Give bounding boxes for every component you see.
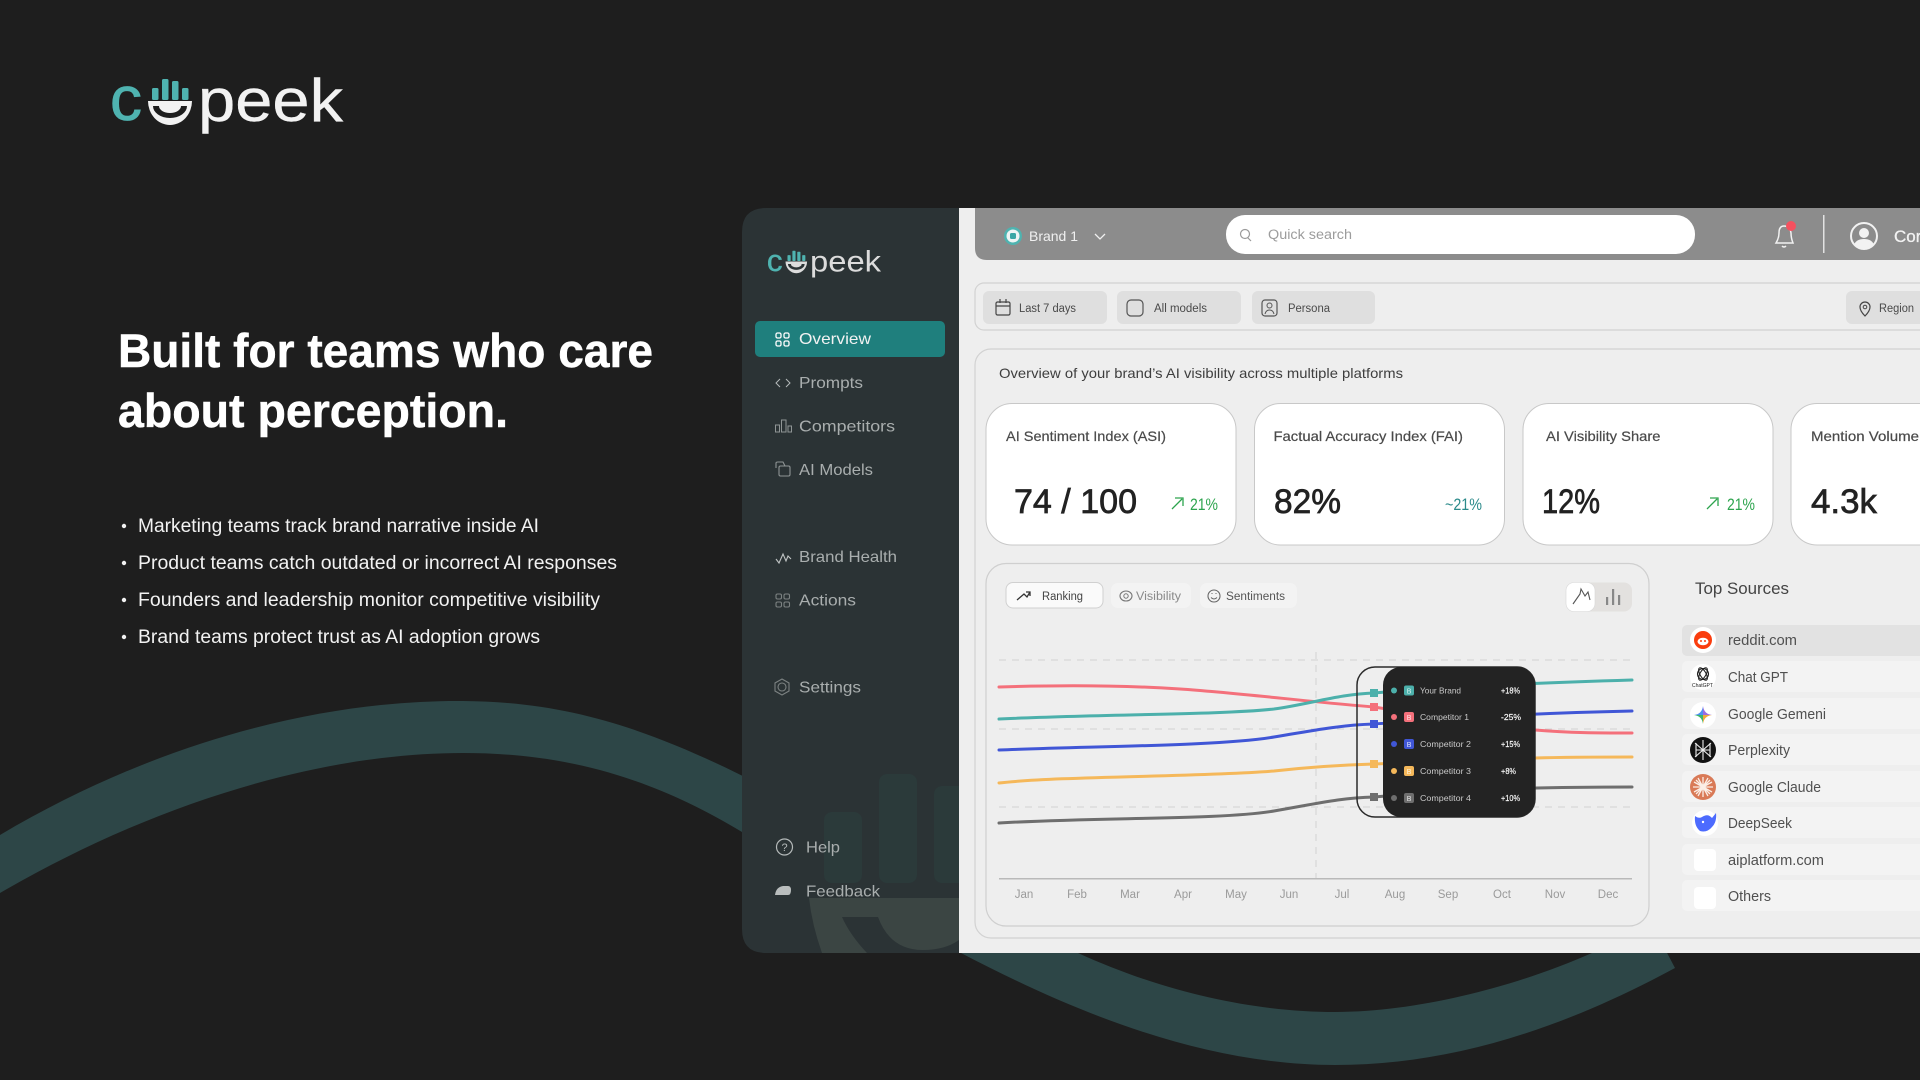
source: DeepSeek: DeepSeek bbox=[1728, 815, 1792, 832]
bullet list: Marketing teams track brand narrative inside AI bbox=[138, 516, 539, 537]
source: Others: Others bbox=[1728, 888, 1771, 905]
tooltip row: Competitor 2: Competitor 2 bbox=[1420, 739, 1471, 749]
chip: All models: All models bbox=[1154, 303, 1207, 315]
card: AI Sentiment Index: AI Sentiment Index (ASI) bbox=[1006, 428, 1166, 444]
tooltip row: Your Brand: +18% bbox=[1501, 686, 1520, 696]
month labels: Dec bbox=[1598, 889, 1618, 901]
source: Others bbox=[1682, 880, 1920, 911]
month labels: Jul bbox=[1335, 889, 1349, 901]
month labels: Nov bbox=[1545, 889, 1565, 901]
source: aiplatform.com: aiplatform.com bbox=[1728, 852, 1824, 869]
panel: main dashboard bbox=[959, 208, 1920, 953]
source: Google Claude bbox=[1682, 771, 1920, 802]
chip: Last 7 days bbox=[983, 291, 1107, 324]
headline: about perception. bbox=[118, 384, 508, 437]
tab: Visibility: Visibility bbox=[1136, 591, 1181, 603]
panel: sidebar bbox=[742, 208, 972, 953]
source: reddit: reddit.com bbox=[1728, 632, 1797, 649]
nav group: main items: Settings bbox=[799, 680, 861, 696]
x axis bbox=[999, 878, 1632, 880]
card: AI Visibility Share: 12% bbox=[1542, 483, 1600, 521]
month labels: Aug bbox=[1385, 889, 1405, 901]
nav group: main items: ? bbox=[782, 842, 788, 854]
sidebar logo: peek bbox=[810, 245, 881, 278]
bullet list bbox=[122, 516, 617, 648]
nav group: main items: Competitors bbox=[799, 418, 895, 436]
bullet list: Product teams catch outdated or incorrect AI responses bbox=[138, 553, 617, 574]
headline: Built for teams who care bbox=[118, 324, 653, 377]
source: Chat GPT: ChatGPT bbox=[1692, 683, 1714, 689]
month labels: Sep bbox=[1438, 889, 1458, 901]
month labels: Jan bbox=[1015, 889, 1033, 901]
card: AI Sentiment Index: 21% bbox=[1190, 496, 1218, 514]
source: Google Gemeni bbox=[1682, 698, 1920, 729]
chart type toggle bbox=[1566, 582, 1632, 612]
source: DeepSeek bbox=[1682, 807, 1920, 838]
tooltip row: Competitor 3: B bbox=[1407, 769, 1412, 776]
chip: All models bbox=[1117, 291, 1241, 324]
filter bar bbox=[975, 283, 1920, 330]
source: reddit bbox=[1682, 625, 1920, 656]
tab: Ranking bbox=[1006, 582, 1103, 608]
nav group: main items: AI Models bbox=[799, 462, 873, 479]
source: Perplexity bbox=[1682, 734, 1920, 765]
tooltip row: Competitor 1: -25% bbox=[1501, 712, 1521, 722]
sidebar logo: c bbox=[767, 244, 783, 278]
panel: overview: Overview of your brand’s AI visibility across multiple platforms bbox=[999, 365, 1403, 381]
tooltip row: Competitor 1 bbox=[1391, 712, 1521, 722]
icon: avatar bbox=[1851, 223, 1877, 249]
nav group: main items: Prompts bbox=[799, 375, 863, 392]
month labels: Mar bbox=[1120, 889, 1140, 901]
search box: Quick search bbox=[1268, 227, 1352, 242]
top header bar: Brand 1 bbox=[1029, 228, 1078, 244]
nav group: main items: Brand Health bbox=[799, 549, 897, 566]
chip: Region bbox=[1846, 291, 1920, 324]
tooltip row: Competitor 2: B bbox=[1407, 742, 1412, 749]
month labels: Feb bbox=[1067, 889, 1087, 901]
card: AI Visibility Share: 21% bbox=[1727, 496, 1755, 514]
panel: overview bbox=[975, 349, 1920, 938]
chip: Region: Region bbox=[1879, 303, 1914, 315]
tooltip row: Competitor 4: +10% bbox=[1501, 793, 1520, 803]
card: Mention Volume: Mention Volume bbox=[1811, 428, 1919, 444]
panel: top sources bbox=[1682, 580, 1920, 911]
card: Mention Volume: 4.3k bbox=[1811, 483, 1878, 521]
card: AI Sentiment Index: 74 / 100 bbox=[1014, 483, 1137, 521]
bullet list: Brand teams protect trust as AI adoption grows bbox=[138, 627, 540, 648]
tooltip row: Competitor 1: B bbox=[1407, 715, 1412, 722]
card: AI Visibility Share: AI Visibility Share bbox=[1546, 428, 1661, 444]
tab: Sentiments: Sentiments bbox=[1226, 591, 1285, 603]
tooltip row: Competitor 2 bbox=[1391, 739, 1520, 749]
tab: Sentiments bbox=[1200, 583, 1297, 608]
nav group: main items: Help bbox=[806, 840, 840, 856]
card: Mention Volume bbox=[1791, 404, 1920, 545]
month labels: Apr bbox=[1174, 889, 1192, 901]
sidebar logo bbox=[767, 244, 881, 278]
brand logo: c bbox=[110, 65, 142, 134]
source: Google Gemeni: Google Gemeni bbox=[1728, 706, 1826, 723]
tooltip row: Competitor 4: B bbox=[1407, 796, 1412, 803]
card: Factual Accuracy Index: Factual Accuracy Index (FAI) bbox=[1274, 428, 1463, 444]
top header bar bbox=[975, 208, 1920, 260]
nav group: main items bbox=[775, 375, 897, 900]
tooltip row: Your Brand: B bbox=[1407, 688, 1412, 696]
card: Factual Accuracy Index: 82% bbox=[1274, 483, 1341, 521]
decorative teal wave bbox=[0, 701, 1675, 1065]
nav group: main items: Actions bbox=[799, 592, 856, 610]
chip: Last 7 days: Last 7 days bbox=[1019, 303, 1076, 315]
brand logo bbox=[110, 65, 344, 134]
icon: notification bell bbox=[1776, 221, 1796, 247]
tooltip row: Competitor 3 bbox=[1391, 766, 1516, 776]
tooltip row: Your Brand bbox=[1391, 686, 1520, 696]
data point markers bbox=[1370, 689, 1378, 801]
chip: Persona: Persona bbox=[1288, 303, 1331, 315]
tooltip row: Competitor 2: +15% bbox=[1501, 739, 1520, 749]
tooltip row: Competitor 1: Competitor 1 bbox=[1420, 712, 1469, 722]
brand logo: peek bbox=[198, 67, 344, 134]
source: aiplatform.com bbox=[1682, 844, 1920, 875]
headline bbox=[118, 324, 653, 437]
tooltip row: Your Brand: Your Brand bbox=[1420, 686, 1461, 696]
chart grid bbox=[999, 652, 1632, 879]
bullet list: Founders and leadership monitor competitive visibility bbox=[138, 590, 601, 611]
panel: top sources: Top Sources bbox=[1695, 580, 1789, 598]
tooltip row: Competitor 4 bbox=[1391, 793, 1520, 803]
month labels: Oct bbox=[1493, 889, 1512, 901]
source: Google Claude: Google Claude bbox=[1728, 779, 1821, 796]
nav item: Overview (active): Overview bbox=[799, 331, 871, 348]
card: AI Visibility Share bbox=[1523, 404, 1773, 545]
source: Chat GPT: Chat GPT bbox=[1728, 669, 1788, 686]
tooltip row: Competitor 3: Competitor 3 bbox=[1420, 766, 1471, 776]
month labels: May bbox=[1225, 889, 1247, 901]
source: Perplexity: Perplexity bbox=[1728, 742, 1790, 759]
tooltip outline bbox=[1357, 667, 1535, 817]
nav group: main items: Feedback bbox=[806, 884, 881, 900]
month labels: Jun bbox=[1280, 889, 1298, 901]
card: Factual Accuracy Index bbox=[1254, 404, 1504, 545]
tooltip bbox=[1383, 667, 1535, 817]
panel: ranking chart bbox=[986, 564, 1649, 926]
card: AI Sentiment Index bbox=[986, 404, 1236, 545]
chip: Persona bbox=[1252, 291, 1375, 324]
tab: Ranking: Ranking bbox=[1042, 591, 1083, 603]
card: Factual Accuracy Index: ~21% bbox=[1445, 496, 1482, 514]
month labels bbox=[1015, 889, 1618, 901]
source: Chat GPT bbox=[1682, 661, 1920, 692]
line series bbox=[999, 680, 1632, 823]
tooltip row: Competitor 3: +8% bbox=[1501, 766, 1516, 776]
search box bbox=[1226, 215, 1695, 254]
tooltip row: Competitor 4: Competitor 4 bbox=[1420, 793, 1471, 803]
tab: Visibility bbox=[1111, 583, 1191, 608]
nav item: Overview (active) bbox=[755, 321, 945, 357]
